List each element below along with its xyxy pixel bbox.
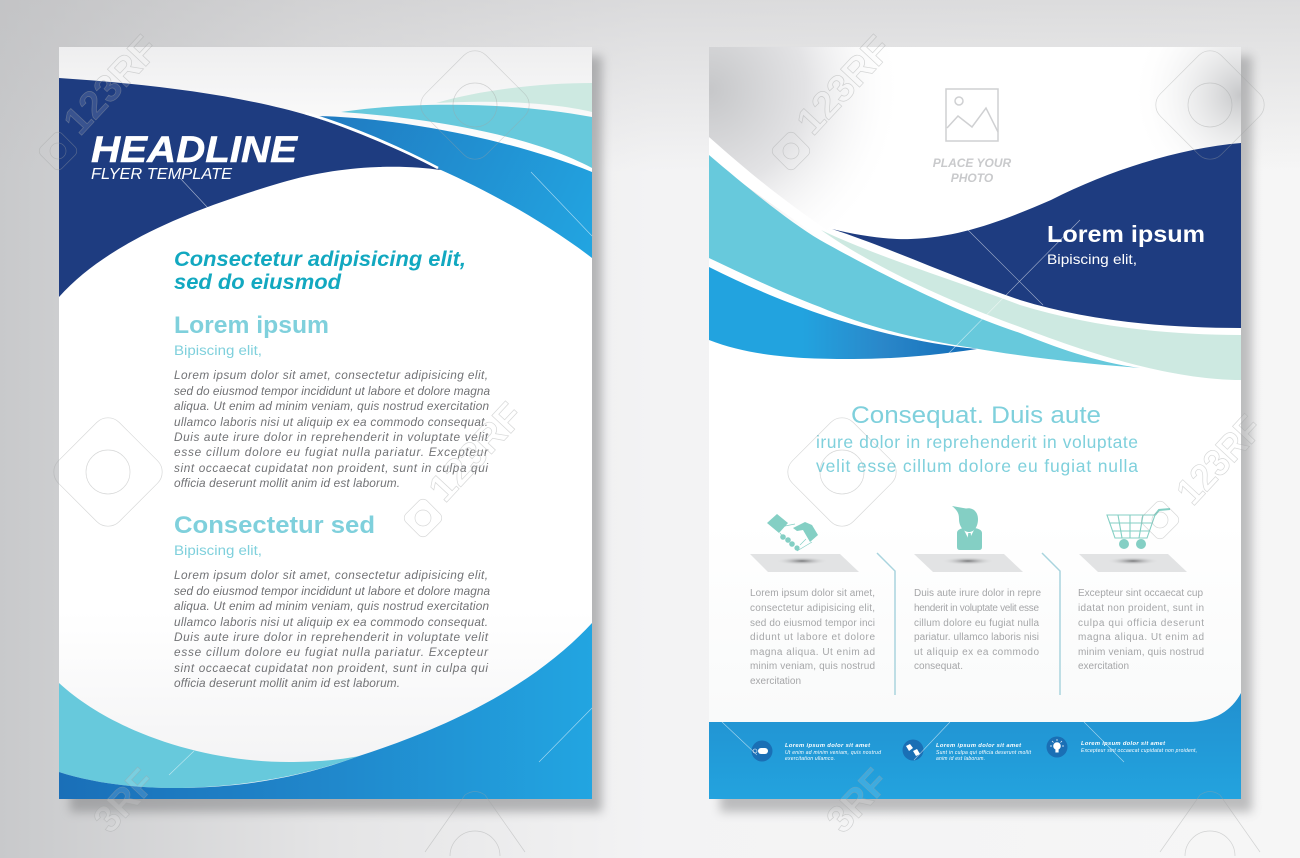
wave: light teal top — [341, 105, 592, 168]
center subheading: velit esse cillum dolore eu fugiat nulla — [816, 456, 1138, 476]
column text one: minim veniam, quis nostrud — [750, 661, 875, 672]
footer text one: Ut enim ad minim veniam, quis nostrud — [785, 750, 881, 756]
navy band heading: Lorem ipsum — [1047, 221, 1205, 247]
footer text one: Lorem ipsum dolor sit amet — [785, 743, 871, 749]
section heading: Lorem ipsum: Lorem ipsum — [174, 312, 329, 339]
body text block one: officia deserunt mollit anim id est laborum. — [174, 476, 400, 490]
intro heading: sed do eiusmod — [174, 271, 342, 294]
wave: mint top — [436, 83, 592, 112]
center subheading — [816, 432, 1138, 476]
headline: HEADLINE — [91, 129, 298, 170]
body text block one: Lorem ipsum dolor sit amet, consectetur adipisicing elit, — [174, 368, 488, 382]
wave: blue band — [709, 267, 977, 359]
column text three — [1078, 588, 1204, 672]
body text block two: sint occaecat cupidatat non proident, sunt in culpa qui — [174, 661, 488, 675]
column text two: cillum dolore eu fugiat nulla — [914, 618, 1039, 629]
body text block one — [174, 368, 490, 490]
icon: footer light bulb — [1046, 736, 1068, 758]
section subheading: Bipiscing elit, — [174, 343, 262, 358]
column text one: didunt ut labore et dolore — [750, 632, 875, 643]
icon: footer pill — [752, 740, 772, 762]
subheadline: FLYER TEMPLATE — [91, 166, 233, 183]
watermarks: 123RF — [56, 28, 167, 143]
footer band — [709, 693, 1241, 799]
intro heading — [174, 248, 466, 294]
icon: businessman — [952, 506, 982, 550]
column text two: pariatur. ullamco laboris nisi — [914, 632, 1039, 643]
body text block two: ullamco laboris nisi ut aliquip ex ea commodo consequat. — [174, 615, 488, 629]
photo placeholder caption — [933, 156, 1012, 185]
wave: blue top — [311, 116, 592, 258]
footer text one — [785, 743, 881, 762]
icon: footer handshake — [902, 740, 924, 760]
divider one — [877, 553, 895, 695]
wave: mint band — [821, 230, 1241, 380]
body text block one: esse cillum dolore eu fugiat nulla pariatur. Excepteur — [174, 445, 489, 459]
watermarks: 123RF — [789, 28, 900, 143]
watermarks: 3RF — [86, 761, 164, 841]
intro heading: Consectetur adipisicing elit, — [174, 248, 466, 271]
body text block one: aliqua. Ut enim ad minim veniam, quis nostrud exercitation — [174, 399, 489, 413]
body text block one: sint occaecat cupidatat non proident, sunt in culpa qui — [174, 461, 488, 475]
wave: navy band — [832, 143, 1241, 328]
column text two: henderit in voluptate velit esse — [914, 603, 1039, 614]
footer text three: Excepteur sint occaecat cupidatat non proident, — [1081, 748, 1197, 754]
column text three: Excepteur sint occaecat cup — [1078, 588, 1203, 599]
watermarks: 123RF — [421, 395, 532, 510]
column text one: magna aliqua. Ut enim ad — [750, 647, 875, 658]
right page shadow — [720, 56, 1252, 812]
column text two: ut aliquip ex ea commodo — [914, 647, 1039, 658]
section heading: Consectetur sed: Consectetur sed — [174, 512, 375, 539]
body text block two: aliqua. Ut enim ad minim veniam, quis nostrud exercitation — [174, 599, 489, 613]
column text one: sed do eiusmod tempor inci — [750, 618, 875, 629]
column text two: consequat. — [914, 661, 963, 672]
watermarks: 3RF — [819, 761, 897, 841]
footer text three — [1081, 741, 1197, 754]
body text block two — [174, 568, 490, 690]
divider two — [1042, 553, 1060, 695]
section subheading two: Bipiscing elit, — [174, 543, 262, 558]
white gap between navy and blue waves — [305, 113, 438, 168]
hairline guides — [169, 172, 1124, 775]
footer text two — [936, 743, 1032, 762]
watermarks: 123RF — [1169, 408, 1271, 513]
platform one — [750, 554, 859, 572]
column text one: Lorem ipsum dolor sit amet, — [750, 588, 875, 599]
column text one — [750, 588, 875, 687]
body text block two: officia deserunt mollit anim id est laborum. — [174, 676, 400, 690]
body text block one: sed do eiusmod tempor incididunt ut labore et dolore magna — [174, 384, 490, 398]
footer text two: Sunt in culpa qui officia deserunt mollit — [936, 750, 1032, 756]
footer text two: Lorem ipsum dolor sit amet — [936, 743, 1022, 749]
icon: shopping cart — [1107, 509, 1170, 549]
navy band subheading: Bipiscing elit, — [1047, 251, 1137, 267]
body text block one: ullamco laboris nisi ut aliquip ex ea commodo consequat. — [174, 415, 488, 429]
column text two: Duis aute irure dolor in repre — [914, 588, 1041, 599]
column text two — [914, 588, 1041, 672]
column text one: consectetur adipisicing elit, — [750, 603, 875, 614]
footer text three: Lorem ipsum dolor sit amet — [1081, 741, 1166, 747]
center subheading: irure dolor in reprehenderit in voluptate — [816, 432, 1138, 452]
center heading: Consequat. Duis aute — [851, 402, 1101, 429]
column text three: idatat non proident, sunt in — [1078, 603, 1204, 614]
panel: right flyer page — [709, 47, 1241, 799]
body text block two: sed do eiusmod tempor incididunt ut labore et dolore magna — [174, 584, 490, 598]
column text one: exercitation — [750, 676, 801, 687]
wave: teal bottom — [59, 683, 359, 788]
column text three: magna aliqua. Ut enim ad — [1078, 632, 1204, 643]
platform two — [914, 554, 1023, 572]
footer text one: exercitation ullamco. — [785, 756, 835, 762]
icon: photo placeholder — [946, 89, 998, 141]
wave: blue bottom — [59, 623, 592, 799]
column text three: exercitation — [1078, 661, 1129, 672]
column text three: minim veniam, quis nostrud — [1078, 647, 1204, 658]
white stripe above teal wave — [709, 137, 830, 240]
left page shadow — [70, 56, 602, 812]
body text block two: Lorem ipsum dolor sit amet, consectetur adipisicing elit, — [174, 568, 488, 582]
photo placeholder caption: PHOTO — [951, 171, 994, 185]
body text block two: Duis aute irure dolor in reprehenderit in voluptate velit — [174, 630, 489, 644]
panel: left flyer page — [59, 47, 592, 799]
footer text two: anim id est laborum. — [936, 756, 985, 762]
body text block one: Duis aute irure dolor in reprehenderit in voluptate velit — [174, 430, 489, 444]
wave: teal band — [709, 155, 1140, 368]
icon: handshake — [767, 514, 818, 551]
column text three: culpa qui officia deserunt — [1078, 618, 1204, 629]
wave: navy header — [59, 78, 441, 297]
photo placeholder caption: PLACE YOUR — [933, 156, 1012, 170]
body text block two: esse cillum dolore eu fugiat nulla pariatur. Excepteur — [174, 645, 489, 659]
platform three — [1079, 554, 1187, 572]
